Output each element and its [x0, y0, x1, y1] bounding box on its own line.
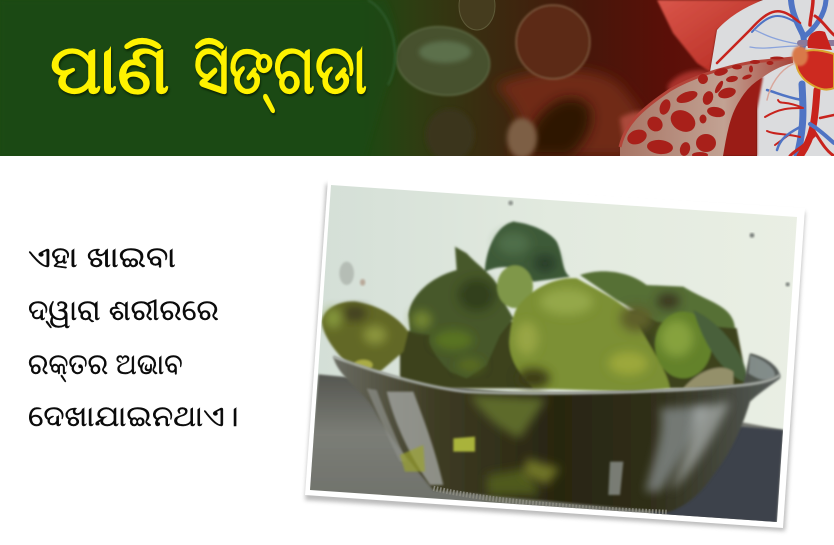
header banner	[0, 0, 834, 161]
background blood cells	[392, 0, 640, 161]
large red cell	[657, 0, 763, 72]
blood vessel cross section	[620, 56, 793, 158]
food pile	[322, 222, 748, 392]
glass bowl	[333, 353, 780, 512]
light anatomy panel	[710, 0, 834, 156]
heart and arteries	[717, 0, 834, 156]
title: ସିଙ୍ଗଡା	[194, 31, 367, 108]
body text: ରକ୍ତର ଅଭାବ	[28, 349, 183, 381]
body text	[28, 242, 735, 510]
green title panel	[396, 48, 398, 60]
title: ପାଣି	[50, 31, 170, 108]
title	[50, 31, 368, 116]
body text: ଏହା ଖାଇବା	[28, 242, 176, 274]
body text: ଦ୍ୱାରା ଶରୀରରେ	[28, 295, 219, 327]
wall	[300, 175, 810, 442]
table	[307, 374, 783, 523]
body text: ଦେଖାଯାଇନଥାଏ।	[28, 401, 239, 433]
photo of water chestnuts in a bowl	[300, 175, 810, 531]
